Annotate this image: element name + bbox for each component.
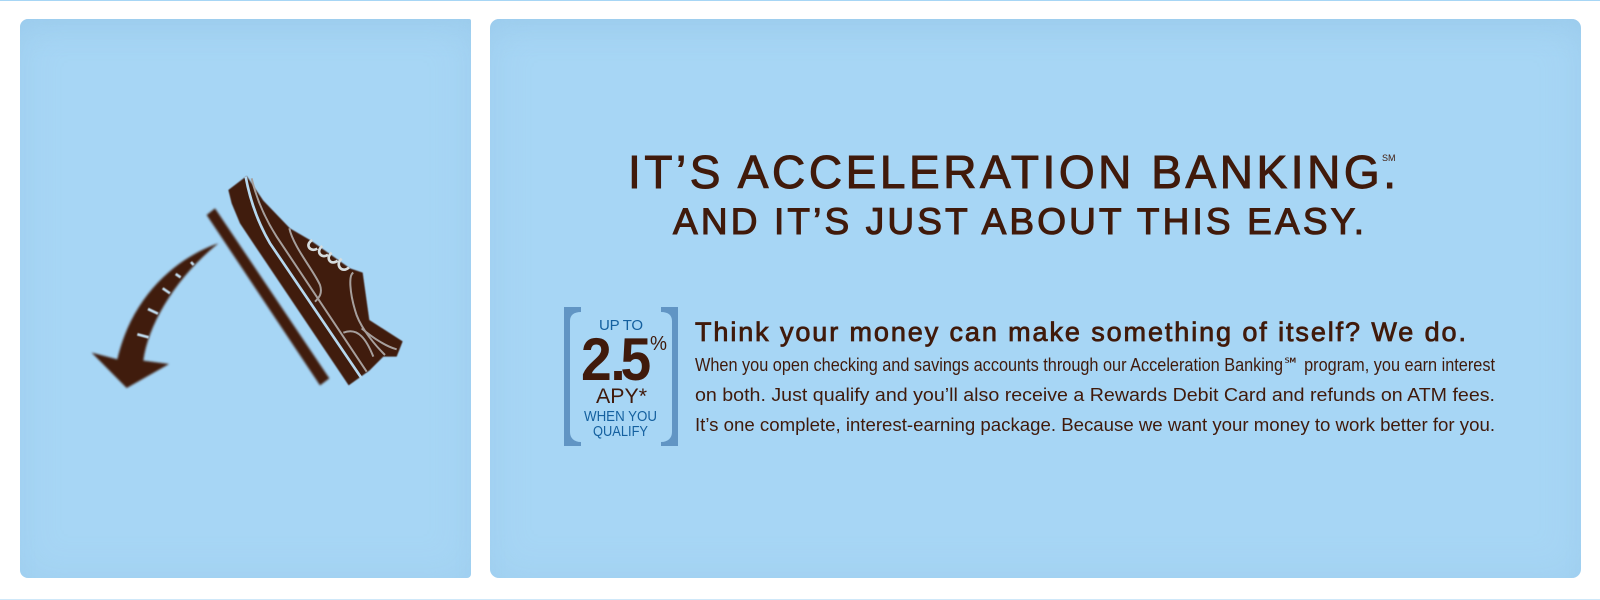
- arrow tick marks: [137, 262, 194, 337]
- title line 2: AND IT’S JUST ABOUT THIS EASY.: [673, 201, 1364, 242]
- body copy: on both. Just qualify and you’ll also receive a Rewards Debit Card and refunds on ATM fees.: [695, 384, 1495, 405]
- badge up to: UP TO: [599, 317, 643, 334]
- badge: rate: [564, 307, 678, 446]
- title: [628, 146, 1396, 242]
- title line 1: IT’S ACCELERATION BANKING.: [628, 146, 1396, 198]
- top rule: [0, 0, 1600, 1]
- icon: shoe on pedal with arrow: [92, 176, 403, 388]
- badge APY: APY*: [596, 385, 647, 408]
- panel: illustration: [20, 19, 471, 578]
- icon: shoe: [228, 176, 403, 385]
- icon: curved arrow: [92, 243, 218, 388]
- service mark: SM: [1382, 153, 1396, 163]
- badge percent: %: [650, 333, 667, 355]
- badge rate: 2.5: [581, 327, 651, 394]
- badge bracket right: [661, 307, 678, 446]
- badge when you: WHEN YOU: [584, 408, 657, 425]
- icon: pedal bar: [207, 208, 329, 385]
- subheading: Think your money can make something of itself? We do.: [695, 317, 1466, 347]
- bottom rule: [0, 599, 1600, 600]
- body copy: When you open checking and savings accounts through our Acceleration Banking℠ program, you earn interest: [695, 354, 1495, 375]
- badge qualify: QUALIFY: [593, 423, 648, 440]
- body copy: It’s one complete, interest-earning package. Because we want your money to work better for you.: [695, 414, 1495, 435]
- panel: message: [490, 19, 1581, 578]
- badge bracket left: [564, 307, 581, 446]
- body copy: [695, 354, 1495, 435]
